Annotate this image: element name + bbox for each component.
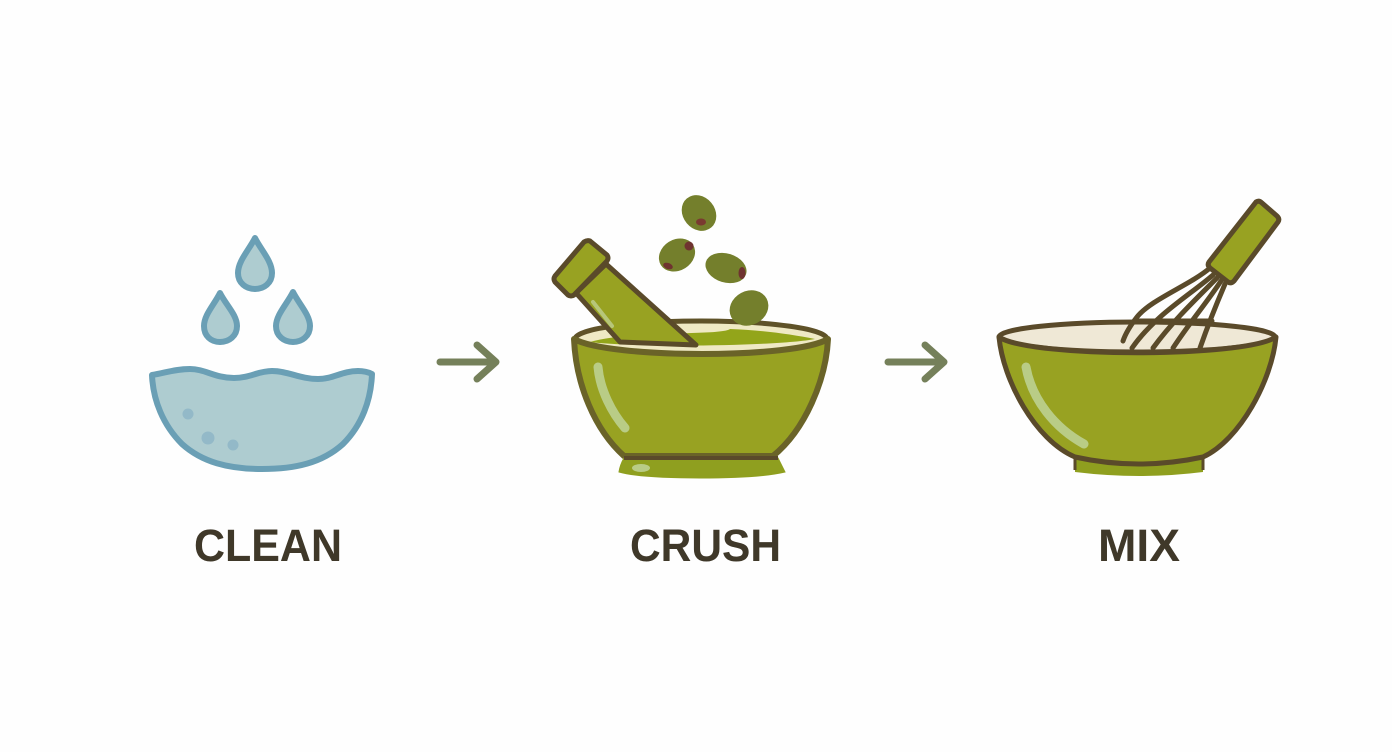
olive 2 <box>653 232 701 278</box>
bowl highlight <box>1026 367 1084 444</box>
bowl highlight <box>598 367 625 428</box>
panel: crush step <box>554 188 828 571</box>
icon: mortar bowl back rim <box>575 321 827 357</box>
panel: clean step <box>152 238 372 571</box>
label: crush: CRUSH <box>630 520 781 571</box>
olive 3 <box>702 248 750 288</box>
bowl foot <box>1075 456 1203 476</box>
label: clean: CLEAN <box>194 520 342 571</box>
icon: falling olives <box>653 188 750 288</box>
bubbles <box>182 408 238 450</box>
mortar foot <box>619 458 785 478</box>
icon: water bowl <box>152 369 372 469</box>
arrow: crush to mix <box>888 345 944 379</box>
arrow: clean to crush <box>440 345 496 379</box>
icon: pestle <box>554 241 696 345</box>
icon: water drops <box>204 238 310 342</box>
panel: mix step <box>999 201 1279 571</box>
whisk handle <box>1208 201 1279 283</box>
whisk wires <box>1123 268 1225 348</box>
icon: mixing bowl body <box>999 337 1276 476</box>
label: mix: MIX <box>1098 520 1180 571</box>
icon: mixing bowl back rim <box>999 322 1275 352</box>
icon: olive over rim <box>723 284 775 332</box>
olive 1 <box>675 188 723 238</box>
icon: mortar bowl body <box>574 339 828 478</box>
icon: whisk <box>1123 201 1279 348</box>
